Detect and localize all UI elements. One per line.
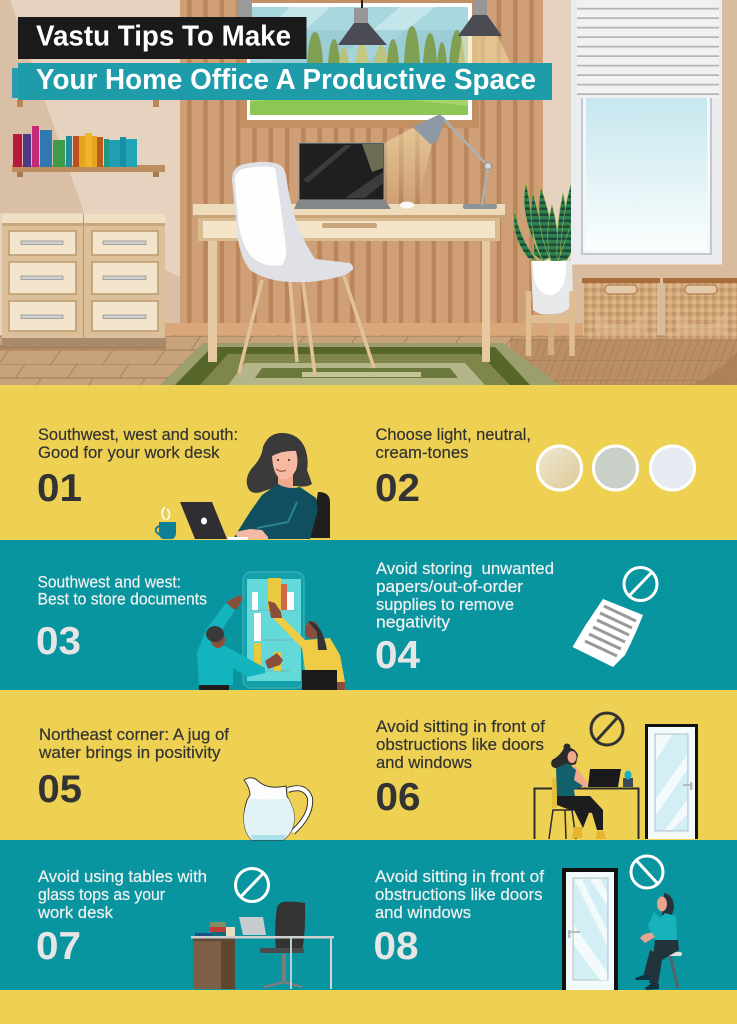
panel: row 4 background [0, 840, 737, 990]
tip 07 text: work desk [37, 903, 113, 922]
tip 07 text: glass tops as your [38, 885, 165, 904]
tip 03 text: Southwest and west: [38, 572, 181, 592]
panel: hero office illustration [0, 0, 737, 386]
icon: woman at desk facing door [534, 744, 638, 839]
panel: row 3 background [0, 690, 737, 840]
tip 08 text: obstructions like doors [375, 885, 542, 904]
tip 02 text: Choose light, neutral, [376, 425, 531, 444]
pendant lamps [237, 0, 510, 63]
tip 04 text: 04 [375, 634, 420, 677]
panel: row 2 background [0, 540, 737, 690]
rug [160, 343, 560, 385]
tip 04 text: papers/out-of-order [376, 577, 523, 596]
tip 01 text: 01 [37, 467, 82, 510]
tip 07 text: 07 [36, 925, 81, 968]
tip 02 text: cream-tones [376, 443, 468, 462]
title line 2: Your Home Office A Productive Space [36, 64, 536, 96]
tip 05 text: 05 [38, 768, 82, 811]
storage baskets [582, 278, 737, 339]
icon: seated woman [635, 893, 682, 990]
mouse [400, 202, 414, 208]
tip 04 text: negativity [376, 612, 451, 632]
title [18, 17, 552, 100]
tip 08 text: Avoid sitting in front of [375, 867, 544, 886]
tip 08 text [374, 867, 544, 968]
panel: footer band [0, 990, 737, 1024]
trees [307, 26, 465, 63]
tip 08 text: and windows [375, 903, 471, 922]
title line 1: Vastu Tips To Make [36, 20, 291, 52]
icon: prohibited sign [591, 713, 623, 745]
tip 02 text: 02 [375, 467, 420, 510]
floor [0, 335, 737, 386]
tip 07 text [36, 867, 207, 968]
icon: office desk with chair [191, 902, 334, 989]
tip 06 text: Avoid sitting in front of [376, 717, 545, 736]
tip 08 text: 08 [374, 925, 418, 968]
right window with blinds [571, 0, 722, 264]
tip 04 text [375, 559, 554, 677]
tip 01 text: Southwest, west and south: [38, 425, 238, 444]
desk lamp light cone [384, 128, 432, 203]
chair [232, 162, 374, 375]
tip 05 text: water brings in positivity [38, 743, 221, 762]
tip 04 text: supplies to remove [376, 595, 514, 614]
icon: prohibited sign [631, 856, 663, 888]
baseboard [165, 323, 583, 335]
tip 03 text: 03 [36, 620, 81, 663]
desk [193, 204, 505, 362]
tip 03 text: Best to store documents [38, 590, 207, 608]
icon: discarded paper [572, 599, 643, 667]
desk lamp [413, 114, 497, 209]
icon: door [562, 868, 618, 990]
tip 01 text: Good for your work desk [38, 443, 220, 462]
panel: row 1 background [0, 385, 737, 540]
icon: cream colour swatches [538, 446, 694, 490]
icon: two people organising documents [197, 572, 345, 690]
tip 06 text: and windows [376, 753, 472, 772]
tip 05 text [38, 725, 229, 811]
tip 05 text: Northeast corner: A jug of [39, 725, 229, 744]
tip 06 text [376, 717, 545, 819]
wood panel wall [180, 0, 543, 325]
tip 06 text: obstructions like doors [376, 735, 544, 754]
cabinet [2, 214, 166, 346]
tip 06 text: 06 [376, 776, 420, 819]
laptop [294, 143, 391, 209]
tip 03 text [36, 572, 207, 663]
icon: water jug [244, 778, 310, 840]
tip 04 text: Avoid storing unwanted [376, 559, 554, 578]
icon: prohibited sign [624, 568, 657, 600]
icon: prohibited sign [236, 868, 268, 902]
tip 01 text [37, 425, 238, 510]
tip 02 text [375, 425, 531, 510]
icon: woman working on laptop [156, 433, 330, 540]
book shelves [12, 68, 165, 177]
back window [240, 0, 479, 128]
icon: door [645, 724, 698, 839]
tip 07 text: Avoid using tables with [38, 867, 207, 886]
plant [514, 183, 576, 356]
